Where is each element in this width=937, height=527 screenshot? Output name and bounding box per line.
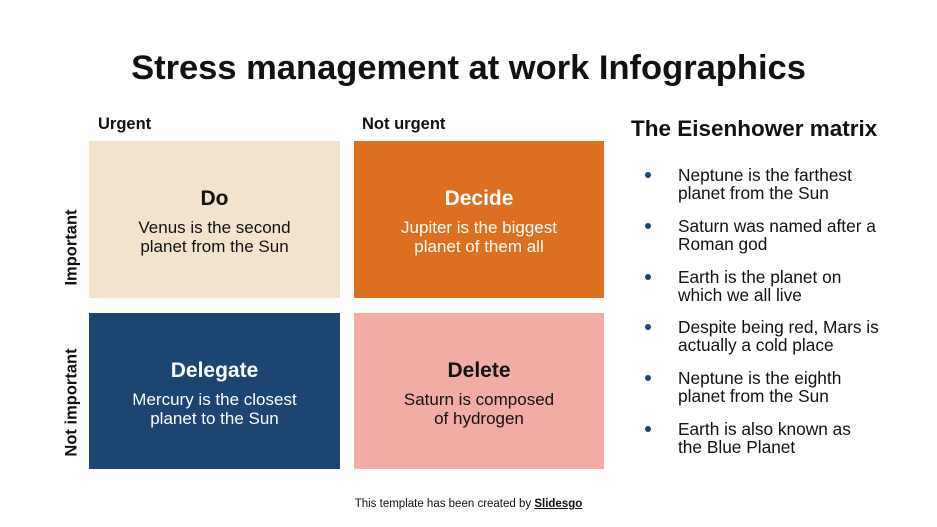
panel: do: planet from the Sun (140, 237, 289, 256)
label: not important: Not important (62, 348, 80, 457)
panel: delegate: Mercury is the closest (132, 390, 297, 409)
bullet list: the Blue Planet (678, 437, 795, 457)
label: important: Important (62, 209, 80, 286)
title: Stress management at work Infographics (131, 49, 806, 87)
bullet list: planet from the Sun (678, 386, 829, 406)
bullet list: Neptune is the eighth (678, 368, 841, 388)
bullet list: Earth is also known as (678, 419, 851, 439)
bullet list: which we all live (678, 285, 802, 305)
panel: delegate: planet to the Sun (150, 409, 279, 428)
panel: decide (354, 141, 604, 298)
panel: delegate (89, 313, 340, 469)
panel: delete (354, 313, 604, 469)
bullet list: Saturn was named after a (678, 216, 876, 236)
label: not urgent: Not urgent (362, 115, 445, 133)
panel: do (89, 141, 340, 298)
footer: This template has been created by Slidesgo (355, 498, 582, 510)
panel: delete: Delete (447, 359, 511, 382)
panel: do: Venus is the second (138, 218, 291, 237)
bullet list: Roman god (678, 234, 767, 254)
panel: decide: Jupiter is the biggest (401, 218, 557, 237)
panel: delete: of hydrogen (434, 409, 524, 428)
bullet list: Despite being red, Mars is (678, 317, 879, 337)
panel: delegate: Delegate (171, 359, 258, 382)
bullet list: planet from the Sun (678, 183, 829, 203)
bullet list: Neptune is the farthest (678, 165, 852, 185)
panel: decide: Decide (445, 187, 513, 210)
heading: eisenhower matrix: The Eisenhower matrix (631, 116, 877, 141)
panel: do: Do (200, 187, 228, 210)
panel: delete: Saturn is composed (404, 390, 554, 409)
panel: decide: planet of them all (414, 237, 544, 256)
bullet list: Earth is the planet on (678, 267, 841, 287)
label: urgent: Urgent (98, 115, 151, 133)
bullet list: actually a cold place (678, 335, 834, 355)
